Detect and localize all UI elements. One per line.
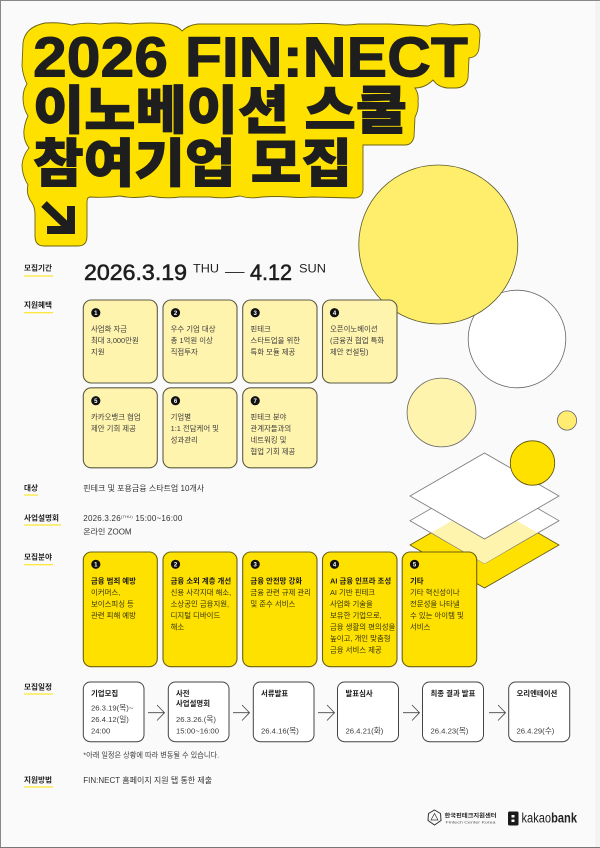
step: briefing: 사업설명회	[176, 699, 210, 708]
field card 2: 신용 사각지대 해소,	[171, 588, 231, 597]
benefit card 4	[322, 300, 397, 383]
benefit card 2: 총 1억원 이상	[171, 336, 213, 345]
benefit card 6: 6	[174, 399, 178, 405]
field card 4	[322, 552, 397, 667]
benefit card 5: 카카오뱅크 협업	[91, 413, 141, 422]
schedule note: *아래 일정은 상황에 따라 변동될 수 있습니다.	[83, 750, 219, 760]
benefit card 7	[243, 388, 317, 468]
step: briefing: 26.3.26.(목)	[176, 715, 216, 724]
field card 2: 금융 소외 계층 개선	[171, 577, 231, 586]
benefit card 2: 2	[174, 311, 178, 317]
field card 5: 수 있는 아이템 및	[410, 611, 464, 620]
step: recruitment: 26.3.19(목)~	[91, 704, 134, 713]
section: support benefits: 지원혜택	[24, 300, 52, 310]
field card 3: 3	[254, 562, 258, 568]
field card 2	[163, 552, 237, 667]
benefit card 5: 제안 기회 제공	[91, 424, 136, 433]
title line 2: 이노베이션 스쿨	[33, 83, 407, 141]
section: recruitment period: 4.12	[250, 260, 292, 285]
step: orientation: 26.4.29(수)	[516, 727, 555, 736]
benefit card 7: 관계자들과의	[250, 424, 291, 433]
field card 4: AI 금융 인프라 조성	[330, 577, 391, 586]
benefit card 3: 스타트업을 위한	[250, 336, 300, 345]
benefit card 7: 협업 기회 제공	[250, 447, 296, 456]
step: pitch review: 26.4.21(화)	[346, 727, 384, 736]
field card 1: 보이스피싱 등	[91, 599, 134, 608]
section: target: 대상	[24, 482, 38, 492]
title line 3: 참여기업 모집	[33, 136, 352, 194]
field card 4: 높이고, 개인 맞춤형	[330, 634, 391, 643]
field card 4: 4	[333, 562, 337, 568]
title line 1: 2026 FIN:NECT	[33, 26, 468, 90]
benefit card 2: 직접투자	[171, 348, 198, 357]
section: recruitment fields: 모집분야	[24, 552, 52, 562]
section: how to apply: 지원방법	[24, 774, 52, 784]
benefit card 7: 핀테크 분야	[250, 413, 287, 422]
step: briefing	[168, 682, 229, 742]
step: recruitment: 26.4.12(일)	[91, 715, 129, 724]
section: recruitment period: 모집기간	[24, 263, 52, 273]
step: document results: 26.4.16(목)	[261, 727, 299, 736]
step: orientation	[509, 682, 570, 742]
step: briefing: 15:00~16:00	[176, 727, 219, 736]
benefit card 1: 사업화 자금	[91, 325, 127, 334]
step: recruitment: 24:00	[91, 727, 110, 736]
benefit card 7: 7	[254, 399, 258, 405]
section: recruitment fields	[24, 552, 477, 667]
benefit card 6	[163, 388, 237, 468]
field card 1: 금융 범죄 예방	[91, 577, 136, 586]
step: recruitment: 기업모집	[91, 689, 118, 698]
arrow	[489, 705, 506, 720]
step: pitch review: 발표심사	[346, 689, 373, 698]
field card 4: 사업화 기술을	[330, 599, 373, 608]
step: orientation: 오리엔테이션	[516, 689, 557, 698]
section: target	[24, 482, 205, 495]
arrow	[403, 705, 420, 720]
field card 1: 1	[94, 562, 98, 568]
section: recruitment period	[24, 260, 326, 285]
field card 1	[83, 552, 157, 667]
field card 5: 전문성을 나타낼	[410, 599, 460, 608]
field card 4: 보유한 기업으로,	[330, 611, 382, 620]
field card 5: 서비스	[410, 622, 431, 631]
section: briefing session: 2026.3.26	[83, 514, 121, 523]
section: briefing session: (THU)	[121, 514, 133, 519]
field card 3	[243, 552, 317, 667]
benefit card 4: 오픈이노베이션	[330, 325, 378, 334]
benefit card 1	[83, 300, 157, 383]
benefit card 3	[243, 300, 317, 383]
benefit card 3: 특화 모듈 제공	[250, 348, 296, 357]
section: schedule	[24, 681, 570, 742]
benefit card 2: 우수 기업 대상	[171, 325, 216, 334]
field card 3: 금융 관련 규제 관리	[250, 588, 311, 597]
logo: kakaobank: kakaobank	[522, 810, 577, 826]
field card 4: 금융 서비스 제공	[330, 645, 382, 654]
benefit card 6: 성과관리	[171, 436, 198, 445]
benefit card 6: 기업별	[171, 413, 191, 422]
title block	[22, 23, 480, 246]
section: recruitment period: THU	[193, 262, 219, 276]
step: final results	[422, 682, 484, 742]
benefit card 4: 4	[333, 311, 337, 317]
section: schedule: 모집일정	[24, 681, 52, 691]
benefit card 7: 네트워킹 및	[250, 436, 287, 445]
field card 2: 소상공인 금융지원,	[171, 599, 229, 608]
field card 5: 5	[413, 562, 417, 568]
benefit card 6: 1:1 전담케어 및	[171, 424, 219, 433]
benefit card 5	[83, 388, 157, 468]
step: final results: 최종 결과 발표	[430, 689, 476, 698]
field card 3: 및 준수 서비스	[250, 599, 296, 608]
section: briefing session: 온라인 ZOOM	[83, 527, 132, 537]
step: document results	[253, 682, 314, 742]
benefit card 5: 5	[94, 399, 98, 405]
field card 2: 디지털 디바이드	[171, 611, 220, 620]
field card 1: 관련 피해 예방	[91, 611, 136, 620]
field card 5: 기타 혁신성이나	[410, 588, 460, 597]
section: briefing session: 15:00~16:00	[133, 514, 183, 523]
step: pitch review	[338, 682, 398, 742]
section: how to apply: FIN:NECT 홈페이지 지원 탭 통한 제출	[83, 775, 212, 785]
field card 5: 기타	[410, 577, 424, 586]
benefit card 1: 지원	[91, 348, 105, 357]
benefit card 4: (금융권 협업 특화	[330, 336, 384, 345]
arrow	[233, 705, 250, 720]
benefit card 1: 1	[94, 311, 98, 317]
step: recruitment	[83, 682, 144, 742]
section: briefing session	[24, 512, 183, 537]
logo: Korea Fintech Center: Fintech Center Korea	[446, 821, 497, 825]
arrow	[318, 705, 334, 720]
field card 5	[402, 552, 477, 667]
decorative circles and layered diamonds	[359, 165, 577, 588]
section: recruitment period: 2026.3.19	[84, 260, 187, 285]
step: final results: 26.4.23(목)	[430, 727, 469, 736]
benefit card 4: 제안 컨설팅)	[330, 348, 369, 357]
field card 2: 해소	[171, 622, 184, 631]
benefit card 3: 핀테크	[250, 325, 271, 334]
section: how to apply	[24, 774, 212, 787]
arrow	[148, 705, 164, 720]
section: briefing session: 사업설명회	[24, 512, 59, 522]
benefit card 2	[163, 300, 237, 383]
field card 4: 금융 생활의 편의성을	[330, 622, 396, 631]
logo: Korea Fintech Center	[428, 810, 497, 825]
field card 1: 이커머스,	[91, 588, 120, 597]
field card 4: AI 기반 핀테크	[330, 588, 375, 597]
field card 3: 금융 안전망 강화	[250, 577, 302, 586]
logo: Korea Fintech Center: 한국핀테크지원센터	[444, 812, 496, 820]
section: recruitment period: SUN	[299, 262, 326, 276]
step: document results: 서류발표	[261, 689, 288, 698]
section: target: 핀테크 및 포용금융 스타트업 10개사	[83, 483, 205, 493]
step: briefing: 사전	[176, 689, 190, 698]
icon: diagonal arrow	[44, 204, 71, 230]
benefit card 1: 최대 3,000만원	[91, 336, 139, 345]
section: support benefits	[24, 300, 397, 468]
benefit card 3: 3	[254, 311, 258, 317]
field card 2: 2	[174, 562, 178, 568]
